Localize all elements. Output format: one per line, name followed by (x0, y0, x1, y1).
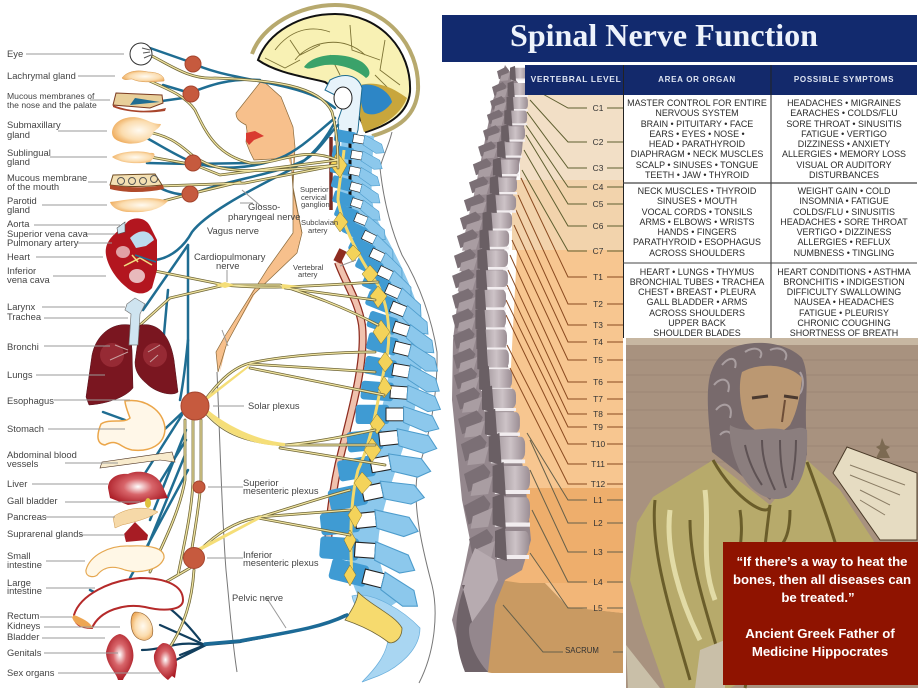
organ and structure labels: gland (7, 204, 30, 215)
organ and structure labels: Bronchi (7, 341, 39, 352)
column: possible symptoms: DISTURBANCES (809, 170, 879, 180)
organ: larynx and trachea (125, 298, 145, 345)
column: possible symptoms: DIFFICULTY SWALLOWING (787, 287, 901, 297)
organ: stomach (98, 401, 165, 450)
organ: bladder (106, 634, 133, 680)
organ and structure labels: vena cava (7, 274, 51, 285)
column: possible symptoms: FATIGUE • PLEURISY (799, 308, 889, 318)
vertebral level labels: SACRUM (565, 646, 599, 655)
organ and structure labels: Mucous membranes of (7, 91, 95, 101)
organ and structure labels: nerve (216, 260, 239, 271)
organ and structure labels: artery (298, 270, 318, 279)
column: area or organ: EARS • EYES • NOSE • (649, 129, 745, 139)
vertebral level labels: T3 (593, 320, 603, 330)
face (740, 366, 802, 434)
organ and structure labels: Liver (7, 478, 27, 489)
organ: eye (130, 43, 152, 65)
vertebral level table header: VERTEBRAL LEVEL (531, 74, 621, 84)
organ and structure labels: Larynx (7, 301, 35, 312)
hair (708, 343, 807, 500)
organ and structure labels: Lachrymal gland (7, 70, 76, 81)
column: possible symptoms: FATIGUE • VERTIGO (801, 129, 887, 139)
superior mesenteric ganglion (193, 481, 205, 493)
vertebral level labels: T11 (591, 459, 605, 469)
table cells background and rules (623, 65, 917, 338)
organ and structure labels: Heart (7, 251, 30, 262)
organ and structure labels: Aorta (7, 218, 30, 229)
organ and structure labels: Kidneys (7, 620, 41, 631)
organ: suprarenal glands (124, 522, 148, 542)
organ and structure labels: Small (7, 550, 30, 561)
organ and structure labels: Vagus nerve (207, 225, 259, 236)
organ and structure labels: Suprarenal glands (7, 528, 83, 539)
vertebral level labels: L3 (593, 547, 603, 557)
column: area or organ: HEAD • PARATHYROID (649, 139, 746, 149)
column: possible symptoms: ALLERGIES • MEMORY LOSS (782, 149, 906, 159)
quote box: “If there’s a way to heat the (736, 554, 908, 569)
vertebral level table header: POSSIBLE SYMPTOMS (794, 75, 894, 84)
quote box (723, 542, 918, 685)
blue nerves (90, 48, 347, 660)
column: area or organ: SINUSES • MOUTH (657, 196, 737, 206)
column: area or organ: PARATHYROID • ESOPHAGUS (633, 237, 761, 247)
organ: small intestine (86, 546, 164, 577)
organ: large intestine (72, 578, 183, 628)
column: possible symptoms: HEADACHES • SORE THROAT (780, 217, 908, 227)
brain and skull (252, 5, 418, 152)
panel: anatomy diagram of the autonomic nervous system (7, 5, 443, 683)
organ and structure labels: intestine (7, 559, 42, 570)
column: area or organ: HEART • LUNGS • THYMUS (640, 267, 754, 277)
column: possible symptoms: BRONCHITIS • INDIGESTION (783, 277, 905, 287)
organ and structure labels: cervical (301, 193, 327, 202)
column: possible symptoms: CHRONIC COUGHING (797, 318, 891, 328)
vertebral level labels: T2 (593, 299, 603, 309)
spinal column (318, 128, 443, 682)
column: possible symptoms: SHORTNESS OF BREATH (790, 328, 898, 338)
organ: pancreas (113, 508, 158, 528)
vertebral level labels: T7 (593, 394, 603, 404)
column: possible symptoms: EARACHES • COLDS/FLU (790, 108, 898, 118)
quote box: be treated.” (781, 590, 855, 605)
organ: gall bladder (145, 498, 151, 508)
column: area or organ: HANDS • FINGERS (657, 227, 737, 237)
organ and structure labels: Gall bladder (7, 495, 58, 506)
vertebral level labels: C7 (593, 246, 604, 256)
organ and structure labels: of the mouth (7, 181, 59, 192)
inferior mesenteric ganglion (184, 548, 204, 568)
organ and structure labels: Bladder (7, 631, 39, 642)
beard (730, 425, 807, 499)
organ: nose mucous membrane (113, 93, 166, 112)
ganglia (182, 56, 201, 202)
robe (630, 460, 900, 688)
column: area or organ: MASTER CONTROL FOR ENTIRE (627, 98, 767, 108)
organ and structure labels: Inferior (7, 265, 36, 276)
organ: abdominal blood vessels (100, 452, 175, 468)
vertebral level labels: T10 (591, 439, 606, 449)
vertebral level labels: T6 (593, 377, 603, 387)
vertebral level labels: C1 (593, 103, 604, 113)
column: area or organ: TEETH • JAW • THYROID (645, 170, 750, 180)
title banner (442, 15, 917, 62)
column: possible symptoms: NAUSEA • HEADACHES (794, 297, 894, 307)
column: area or organ: BRAIN • PITUITARY • FACE (641, 119, 753, 129)
organ and structure labels: Superior (243, 477, 278, 488)
organ: submaxillary gland (112, 117, 161, 144)
vertebral level labels: C4 (593, 182, 604, 192)
column: possible symptoms: ALLERGIES • REFLUX (797, 237, 891, 247)
column: possible symptoms: WEIGHT GAIN • COLD (798, 186, 891, 196)
organ and structure labels: Rectum (7, 610, 39, 621)
column: possible symptoms: HEADACHES • MIGRAINES (787, 98, 901, 108)
organ and structure labels: intestine (7, 585, 42, 596)
column: area or organ: CHEST • BREAST • PLEURA (638, 287, 756, 297)
organ and structure labels: Superior vena cava (7, 228, 89, 239)
column: area or organ: NERVOUS SYSTEM (655, 108, 739, 118)
vertebral level labels: T1 (593, 272, 603, 282)
organ: mucous membrane of the mouth (110, 174, 164, 192)
vertebral level labels: C5 (593, 199, 604, 209)
vertebral level table header (525, 65, 917, 95)
organ and structure labels: Pelvic nerve (232, 592, 283, 603)
organ and structure labels: ganglion (301, 200, 330, 209)
organ and structure labels: Sublingual (7, 147, 51, 158)
column: area or organ: NECK MUSCLES • THYROID (638, 186, 757, 196)
column: area or organ: ACROSS SHOULDERS (649, 248, 745, 258)
organ and structure labels: vessels (7, 458, 39, 469)
portrait of Hippocrates (626, 338, 918, 688)
vertebral level labels (565, 103, 606, 655)
column: area or organ: GALL BLADDER • ARMS (647, 297, 747, 307)
organ and structure labels: the nose and the palate (7, 100, 97, 110)
vertebral level labels: T9 (593, 422, 603, 432)
desk and hand (626, 640, 725, 688)
organ and structure labels: Cardiopulmonary (194, 251, 266, 262)
organ and structure labels: mesenteric plexus (243, 557, 319, 568)
column: possible symptoms: NUMBNESS • TINGLING (794, 248, 894, 258)
title banner: Spinal Nerve Function (510, 17, 818, 53)
organ and structure labels: Solar plexus (248, 400, 300, 411)
organ and structure labels: Inferior (243, 549, 272, 560)
column: possible symptoms: HEART CONDITIONS • ASTHMA (777, 267, 911, 277)
organ and structure labels: Parotid (7, 195, 37, 206)
column: possible symptoms (777, 98, 911, 338)
vertebral level labels: T8 (593, 409, 603, 419)
organ and structure labels: Esophagus (7, 395, 54, 406)
column: area or organ: ACROSS SHOULDERS (649, 308, 745, 318)
organ and structure labels: Sex organs (7, 667, 55, 678)
cerebellum (359, 84, 407, 132)
organ: sublingual gland (112, 151, 154, 163)
column: possible symptoms: DIZZINESS • ANXIETY (798, 139, 890, 149)
solar plexus ganglion (181, 392, 209, 420)
quote box: Ancient Greek Father of (745, 626, 895, 641)
column: possible symptoms: VISUAL OR AUDITORY (796, 160, 892, 170)
vertebral level labels: T4 (593, 337, 603, 347)
organ and structure labels: Pulmonary artery (7, 237, 79, 248)
tan sympathetic nerves (125, 55, 385, 650)
book (833, 447, 917, 540)
organ and structure labels: Vertebral (293, 263, 324, 272)
organ: lungs (86, 325, 178, 405)
column: area or organ: UPPER BACK (668, 318, 726, 328)
organ: sex organs (154, 643, 177, 680)
vertebral level labels: L1 (593, 495, 603, 505)
organ and structure labels: Genitals (7, 647, 42, 658)
organ and structure labels: Submaxillary (7, 119, 61, 130)
quote box: bones, then all diseases can (733, 572, 911, 587)
organ: parotid gland (110, 198, 168, 212)
artery (328, 137, 363, 543)
organ and structure labels: Glosso- (248, 201, 280, 212)
column: possible symptoms: VERTIGO • DIZZINESS (797, 227, 891, 237)
column: area or organ: ARMS • ELBOWS • WRISTS (639, 217, 755, 227)
organ: lachrymal gland (122, 71, 164, 82)
vertebral leader lines (503, 88, 623, 652)
organ and structure labels: Trachea (7, 311, 42, 322)
organ: kidney (131, 612, 153, 640)
vertebral level labels: C3 (593, 163, 604, 173)
organ and structure labels: gland (7, 156, 30, 167)
vertebral level labels: L2 (593, 518, 603, 528)
face and arm skin (220, 80, 302, 372)
column: area or organ: DIAPHRAGM • NECK MUSCLES (631, 149, 763, 159)
illustrated spine (452, 65, 531, 672)
organ and structure labels: Stomach (7, 423, 44, 434)
sacrum (352, 595, 420, 682)
vertebral level labels: C2 (593, 137, 604, 147)
column: area or organ: SCALP • SINUSES • TONGUE (636, 160, 758, 170)
corpus callosum (304, 55, 369, 78)
spinal cord (330, 150, 393, 586)
column: area or organ (627, 98, 767, 338)
organ and structure labels: mesenteric plexus (243, 485, 319, 496)
organ and structure labels: Superior (300, 185, 329, 194)
vertebral level labels: T12 (591, 479, 606, 489)
organ and structure labels (7, 48, 338, 678)
vertebral level labels: C6 (593, 221, 604, 231)
vertebral level labels: L5 (593, 603, 603, 613)
organ and structure labels: gland (7, 129, 30, 140)
column: area or organ: SHOULDER BLADES (653, 328, 741, 338)
organ: heart (106, 218, 157, 293)
vertebral level labels: L4 (593, 577, 603, 587)
organ and structure labels: Pancreas (7, 511, 47, 522)
organ and structure labels: pharyngeal nerve (228, 211, 300, 222)
column: possible symptoms: INSOMNIA • FATIGUE (799, 196, 889, 206)
organ and structure labels: Lungs (7, 369, 33, 380)
quote box: Medicine Hippocrates (752, 644, 888, 659)
organ and structure labels: Abdominal blood (7, 449, 77, 460)
brain stem (325, 76, 362, 152)
statuette (876, 438, 890, 458)
organ and structure labels: Subclavian (301, 218, 338, 227)
vertebral level column background (467, 95, 623, 673)
vertebral level labels: T5 (593, 355, 603, 365)
column: area or organ: VOCAL CORDS • TONSILS (642, 207, 752, 217)
body outline (217, 132, 437, 683)
lips (246, 131, 264, 145)
pointer lines (26, 54, 356, 673)
column: possible symptoms: SORE THROAT • SINUSITIS (786, 119, 902, 129)
organ: liver (108, 472, 168, 505)
organ and structure labels: Large (7, 577, 31, 588)
organ and structure labels: Eye (7, 48, 23, 59)
organ and structure labels: artery (308, 226, 328, 235)
column: area or organ: BRONCHIAL TUBES • TRACHEA (630, 277, 764, 287)
organ and structure labels: Mucous membrane (7, 172, 87, 183)
panel: Spinal Nerve Function chart (442, 15, 918, 688)
vertebral level table header: AREA OR ORGAN (658, 75, 736, 84)
column: possible symptoms: COLDS/FLU • SINUSITIS (793, 207, 895, 217)
